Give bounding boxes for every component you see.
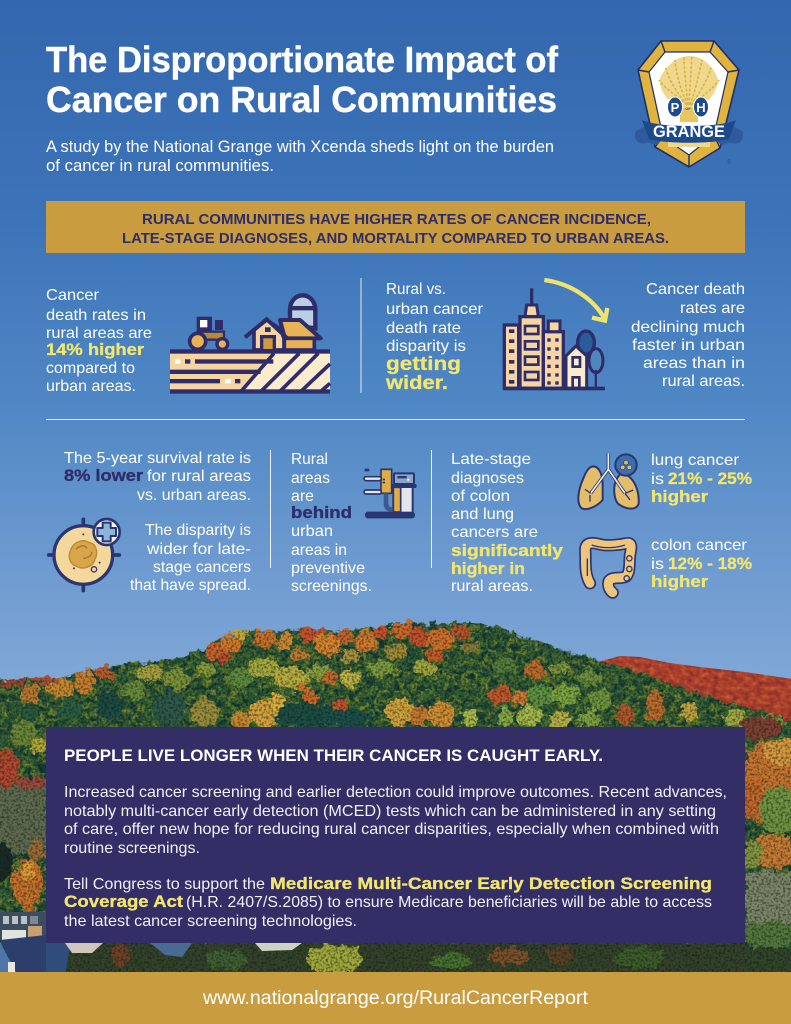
banner: key finding: RURAL COMMUNITIES HAVE HIGHER RATES OF CANCER INCIDENCE, — [142, 212, 651, 228]
icon: lungs — [578, 453, 639, 509]
autumn hillside photo — [0, 610, 791, 980]
text: wider for late-stage cancers — [130, 522, 251, 594]
text: 5-year survival rate: 8% lower — [64, 467, 144, 485]
text: behind in preventive screenings: are — [291, 488, 314, 505]
text: declining faster in urban areas: declining much — [631, 319, 745, 336]
text: behind in preventive screenings: preventive — [291, 560, 365, 577]
left strip under panel — [0, 785, 46, 855]
text: colon cancer statistic: 12% - 18% — [668, 555, 752, 573]
text: late-stage diagnoses: cancers are — [451, 524, 538, 541]
footer bar with URL: www.nationalgrange.org/RuralCancerReport — [202, 987, 589, 1009]
text: disparity getting wider: urban cancer — [386, 301, 484, 318]
text: behind in preventive screenings: areas in — [291, 542, 347, 559]
text: behind in preventive screenings: urban — [291, 523, 333, 540]
banner: key finding: LATE-STAGE DIAGNOSES, AND MORTALITY COMPARED TO URBAN AREAS. — [122, 231, 669, 247]
paragraph: early detection: of care, offer new hope for reducing rural cancer disparities, especially when combined with — [64, 821, 719, 838]
text: late-stage diagnoses — [451, 451, 564, 595]
barn — [280, 320, 321, 338]
paragraph: call to Congress: Coverage Act — [64, 893, 184, 911]
text: 14% higher death rates: urban areas. — [46, 378, 136, 395]
text: behind in preventive screenings: behind — [291, 504, 352, 522]
divider — [360, 278, 362, 393]
text: late-stage diagnoses: diagnoses — [451, 470, 524, 487]
silo — [290, 295, 315, 328]
logo: National Grange shield: GRANGE — [653, 122, 725, 141]
divider — [270, 450, 271, 568]
P of H — [668, 97, 682, 117]
icon: colon — [585, 543, 632, 593]
paragraph: call to Congress: Tell Congress to support the — [64, 876, 265, 893]
paragraph: early detection — [64, 784, 727, 857]
text: behind in preventive screenings: areas — [291, 470, 330, 487]
paragraph: call to Congress — [64, 875, 712, 930]
text: lung cancer statistic — [651, 452, 752, 506]
divider — [46, 419, 745, 420]
text: disparity getting wider: getting — [386, 354, 461, 375]
paragraph: early detection: routine screenings. — [64, 840, 200, 857]
bottom strip — [66, 941, 748, 972]
footer bar with URL — [0, 972, 791, 1024]
text: declining faster in urban areas: rural areas. — [662, 373, 745, 390]
text: behind in preventive screenings: Rural — [291, 451, 328, 468]
paragraph: early detection: notably multi-cancer early detection (MCED) tests which can be administered in any setting — [64, 803, 716, 820]
logo: National Grange shield: OF — [685, 106, 691, 111]
house details at lower left — [0, 912, 46, 940]
text: colon cancer statistic: higher — [651, 573, 709, 591]
text: declining faster in urban areas: faster in urban — [632, 337, 745, 354]
text: wider for late-stage cancers: that have spread. — [130, 577, 251, 594]
paragraph: call to Congress: the latest cancer screening technologies. — [64, 913, 357, 930]
text: disparity getting wider: death rate — [386, 320, 461, 337]
panel heading: PEOPLE LIVE LONGER WHEN THEIR CANCER IS CAUGHT EARLY. — [64, 747, 603, 765]
tractor — [197, 317, 212, 333]
divider — [431, 450, 432, 568]
text: wider for late-stage cancers: wider for late- — [146, 541, 251, 558]
text: 14% higher death rates: compared to — [46, 360, 135, 377]
icon: screening machine — [364, 469, 417, 518]
text: late-stage diagnoses: Late-stage — [451, 451, 531, 468]
paragraph: call to Congress: Medicare Multi-Cancer Early Detection Screening — [270, 875, 712, 893]
title: The Disproportionate Impact of — [46, 39, 559, 80]
logo: National Grange shield: P — [671, 100, 680, 115]
wheat sheaf — [659, 56, 719, 147]
text: declining faster in urban areas: rates are — [680, 300, 745, 317]
text: disparity getting wider: Rural vs. — [386, 281, 446, 298]
text: 14% higher death rates: rural areas are — [46, 325, 152, 342]
subtitle — [46, 138, 554, 175]
text: 5-year survival rate: The 5-year survival rate is — [64, 450, 251, 467]
paragraph: early detection: Increased cancer screening and earlier detection could improve outcomes. Recent advances, — [64, 784, 727, 801]
text: 14% higher death rates — [46, 287, 152, 395]
icon: farm with tractor, barn and silo — [170, 295, 330, 394]
text: declining faster in urban areas — [631, 281, 745, 390]
ribbon — [635, 124, 660, 145]
logo: National Grange shield: H — [696, 100, 706, 115]
text: wider for late-stage cancers: The disparity is — [145, 522, 251, 539]
text: declining faster in urban areas: areas than in — [643, 355, 745, 372]
text: behind in preventive screenings — [291, 451, 372, 595]
subtitle: A study by the National Grange with Xcenda sheds light on the burden — [46, 138, 554, 156]
logo: National Grange shield: ® — [727, 159, 732, 166]
text: late-stage diagnoses: of colon — [451, 488, 510, 505]
icon: tumour target with medical cross — [49, 519, 120, 591]
text: 5-year survival rate: vs. urban areas. — [137, 487, 251, 504]
text: lung cancer statistic: 21% - 25% — [668, 470, 752, 488]
text: behind in preventive screenings: screenings. — [291, 578, 372, 595]
banner: key finding — [46, 201, 745, 253]
subtitle: of cancer in rural communities. — [46, 157, 274, 175]
text: lung cancer statistic: is — [651, 471, 664, 488]
paragraph: call to Congress: (H.R. 2407/S.2085) to ensure Medicare beneficiaries will be able to access — [186, 894, 712, 911]
text: colon cancer statistic: colon cancer — [651, 537, 748, 554]
text: late-stage diagnoses: significantly — [451, 542, 564, 560]
text: lung cancer statistic: higher — [651, 488, 709, 506]
icon: city buildings with declining arrow — [503, 280, 607, 390]
text: lung cancer statistic: lung cancer — [651, 452, 740, 469]
right strip — [738, 717, 782, 739]
arrow — [544, 280, 607, 321]
text: late-stage diagnoses: rural areas. — [451, 578, 533, 595]
logo: National Grange shield — [635, 41, 743, 167]
text: late-stage diagnoses: and lung — [451, 506, 514, 523]
text: colon cancer statistic — [651, 537, 752, 591]
text: disparity getting wider: wider. — [385, 373, 448, 394]
text: declining faster in urban areas: Cancer death — [646, 281, 745, 298]
text: wider for late-stage cancers: stage cancers — [153, 559, 251, 576]
panel: early detection call to action — [46, 727, 745, 943]
text: 14% higher death rates: death rates in — [46, 307, 146, 324]
text: disparity getting wider: disparity is — [386, 338, 466, 355]
text: 14% higher death rates: Cancer — [46, 287, 100, 304]
text: 14% higher death rates: 14% higher — [46, 341, 145, 359]
title — [46, 39, 559, 120]
text: disparity getting wider — [385, 281, 484, 394]
text: 5-year survival rate: for rural areas — [147, 468, 251, 485]
text: 5-year survival rate — [64, 450, 251, 504]
text: late-stage diagnoses: higher in — [451, 560, 525, 578]
text: colon cancer statistic: is — [651, 556, 664, 573]
title: Cancer on Rural Communities — [46, 79, 557, 120]
